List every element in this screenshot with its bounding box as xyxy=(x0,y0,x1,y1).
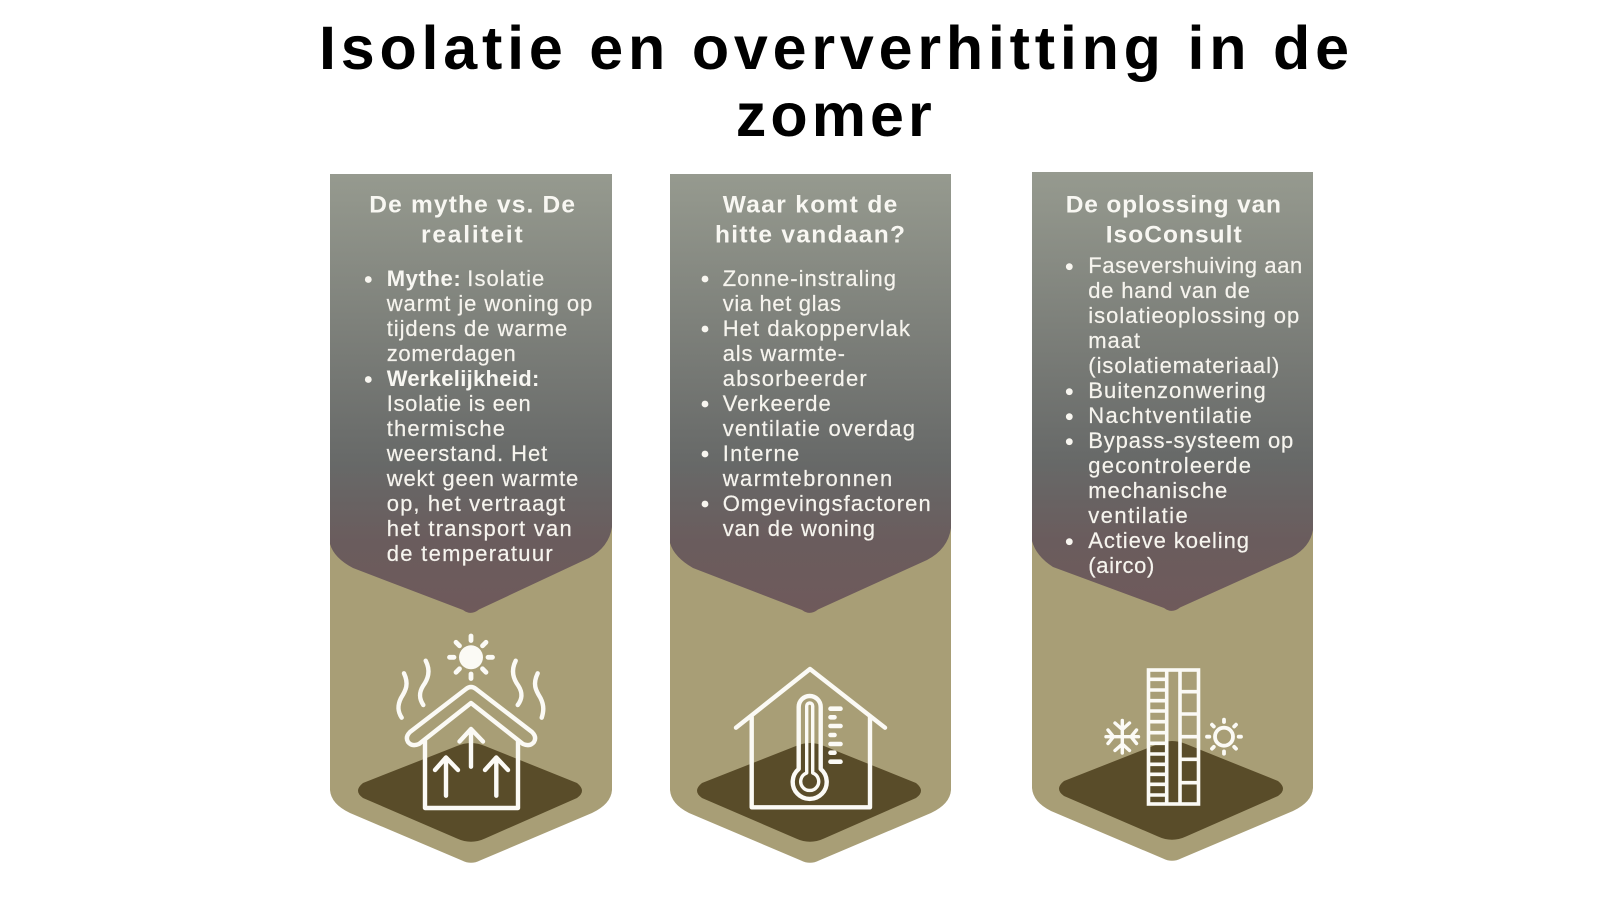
bullet list xyxy=(702,266,931,541)
gradient banner xyxy=(670,174,951,613)
bullet list: tijdens de warme xyxy=(387,316,567,341)
bullet list: (isolatiemateriaal) xyxy=(1088,353,1279,378)
icon: house with sun, heat waves and rising arrows xyxy=(398,636,543,808)
bullet list: warmtebronnen xyxy=(722,466,892,491)
bullet list: Mythe: xyxy=(387,266,461,291)
bullet list: Isolatie is een xyxy=(387,391,531,416)
sun xyxy=(1207,720,1241,754)
bullet list: als warmte- xyxy=(723,341,845,366)
bullet list: de hand van de xyxy=(1088,278,1250,303)
bullet list: mechanische xyxy=(1088,478,1227,503)
bullet list: de temperatuur xyxy=(387,541,553,566)
heading: De oplossing van xyxy=(1066,192,1281,219)
bullet list: maat xyxy=(1088,328,1140,353)
panel: de mythe vs. de realiteit xyxy=(330,174,612,863)
icon: house with thermometer xyxy=(736,669,885,807)
bullet list: isolatieoplossing op xyxy=(1088,303,1299,328)
bullet list: Fasevershuiving aan xyxy=(1088,253,1302,278)
bullet list: absorbeerder xyxy=(723,366,867,391)
bullet list: warmt je woning op xyxy=(386,291,592,316)
bullet list: ventilatie xyxy=(1088,503,1188,528)
bullet list: Buitenzonwering xyxy=(1088,378,1266,403)
heading: IsoConsult xyxy=(1106,222,1242,249)
panel: waar komt de hitte vandaan xyxy=(670,174,951,863)
bullet list: ventilatie overdag xyxy=(723,416,915,441)
bullet list: Interne xyxy=(723,441,799,466)
panel: de oplossing van isoconsult xyxy=(1032,172,1313,861)
snowflake xyxy=(1106,720,1138,753)
bullet list: (airco) xyxy=(1088,553,1154,578)
bullet list: Het dakoppervlak xyxy=(723,316,911,341)
diamond base xyxy=(358,743,582,842)
bullet list: wekt geen warmte xyxy=(386,466,578,491)
diamond base xyxy=(697,743,921,842)
diamond base xyxy=(1059,741,1283,840)
bullet list: via het glas xyxy=(723,291,841,316)
bullet list xyxy=(365,266,592,566)
bullet list: Werkelijkheid: xyxy=(387,366,539,391)
panel background xyxy=(330,174,612,863)
bullet list: op, het vertraagt xyxy=(387,491,565,516)
bullet list: het transport van xyxy=(387,516,572,541)
heading: De mythe vs. De xyxy=(369,192,575,219)
heading xyxy=(715,192,905,249)
bullet list: Verkeerde xyxy=(723,391,831,416)
panel background xyxy=(1032,172,1313,861)
title: zomer xyxy=(736,81,932,149)
heading xyxy=(369,192,575,249)
gradient banner xyxy=(1032,172,1313,611)
bullet list: Isolatie xyxy=(467,266,544,291)
gradient banner xyxy=(330,174,612,613)
bullet list: Zonne-instraling xyxy=(723,266,896,291)
title: Isolatie en oververhitting in de xyxy=(319,14,1349,82)
title xyxy=(319,14,1349,149)
heading: realiteit xyxy=(421,222,523,249)
bullet list xyxy=(1066,253,1302,578)
bullet list: Nachtventilatie xyxy=(1088,403,1252,428)
bullet list: zomerdagen xyxy=(387,341,516,366)
bullet list: Actieve koeling xyxy=(1088,528,1249,553)
bullet list: weerstand. Het xyxy=(386,441,547,466)
bullet list: gecontroleerde xyxy=(1088,453,1251,478)
bullet list: thermische xyxy=(387,416,505,441)
heading xyxy=(1066,192,1281,249)
heading: hitte vandaan? xyxy=(715,222,905,249)
icon: wall layers with snowflake and sun xyxy=(1106,670,1241,804)
heading: Waar komt de xyxy=(723,192,897,219)
panel background xyxy=(670,174,951,863)
bullet list: Bypass-systeem op xyxy=(1088,428,1293,453)
bullet list: van de woning xyxy=(723,516,875,541)
bullet list: Omgevingsfactoren xyxy=(723,491,931,516)
